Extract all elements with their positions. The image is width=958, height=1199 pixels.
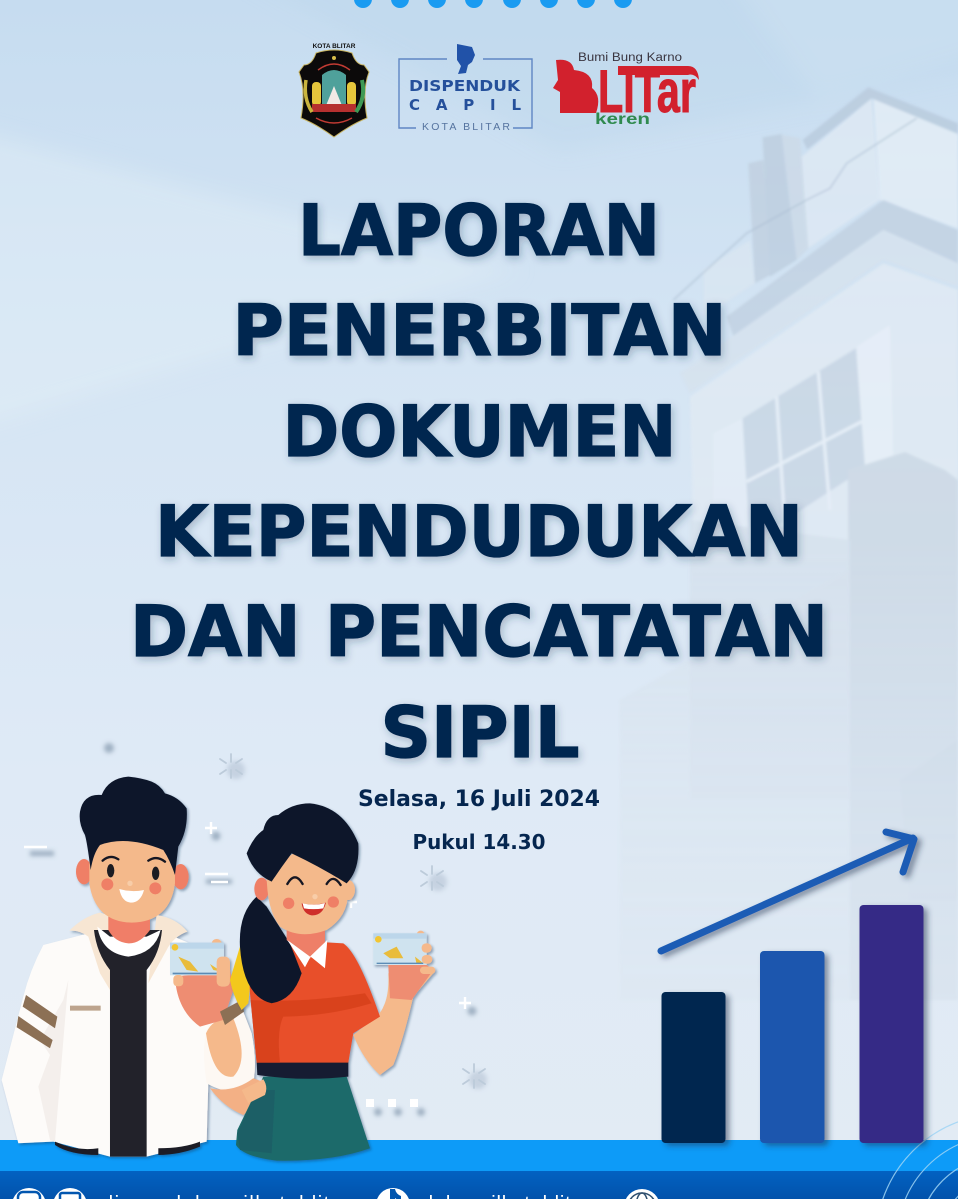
man ears and face <box>76 859 92 884</box>
woman yellow bag <box>230 947 251 1010</box>
footer bar <box>0 1114 958 1199</box>
logo: Blitar Keren: LITar <box>598 58 696 125</box>
logo: Kota Blitar crest <box>299 43 369 137</box>
man character <box>2 777 255 1157</box>
title: KEPENDUDUKAN <box>155 491 803 573</box>
logo: Dispenduk Capil: KOTA BLITAR <box>422 121 510 133</box>
woman character <box>210 803 435 1161</box>
icon: instagram <box>12 1188 46 1199</box>
woman arm behind <box>210 1078 267 1115</box>
man jacket <box>2 932 210 1157</box>
sparkle decorations <box>24 743 487 1116</box>
bar 2 <box>760 951 824 1143</box>
bar chart <box>662 905 924 1143</box>
title: DAN PENCATATAN <box>130 591 828 673</box>
title <box>130 190 828 774</box>
man hair <box>80 777 187 875</box>
man stripes <box>17 995 57 1048</box>
woman ear and face <box>254 878 269 900</box>
title: DOKUMEN <box>282 391 676 473</box>
man eyes and smile <box>107 864 114 877</box>
woman id card and fingers <box>373 931 435 974</box>
logo: Kota Blitar crest: KOTA BLITAR <box>313 43 356 50</box>
title: PENERBITAN <box>232 290 726 372</box>
title: LAPORAN <box>298 190 660 272</box>
logo: Dispenduk Capil: DISPENDUK <box>409 77 522 95</box>
bottom light-blue band <box>0 1140 958 1171</box>
icon: website globe <box>624 1189 660 1199</box>
icon: facebook <box>53 1188 87 1199</box>
title: SIPIL <box>380 692 580 774</box>
footer social icons and handles <box>12 1188 660 1199</box>
woman hand on man's arm <box>242 1079 266 1103</box>
woman hair <box>247 803 358 883</box>
building photo backdrop <box>674 88 958 901</box>
bar 3 <box>860 905 924 1143</box>
logo: Blitar Keren <box>553 52 699 128</box>
logo: Blitar Keren: Bumi Bung Karno <box>578 52 682 64</box>
woman eyes and smile <box>287 877 341 885</box>
man shirt <box>94 930 162 1157</box>
icon: tiktok <box>376 1188 410 1199</box>
time: Pukul 14.30 <box>412 830 546 854</box>
woman neck and collar <box>287 930 325 960</box>
arrow: growth <box>661 832 914 951</box>
woman raised arm with id card <box>353 973 433 1075</box>
date: Selasa, 16 Juli 2024 <box>358 786 600 812</box>
woman ponytail <box>240 897 302 1003</box>
woman skirt <box>236 1077 370 1161</box>
woman shirt <box>248 940 380 1063</box>
logo: Blitar Keren: keren <box>595 111 650 128</box>
logo: Dispenduk Capil <box>399 44 532 133</box>
man arm with id card <box>204 1003 255 1092</box>
top decorative dots <box>354 0 632 8</box>
bar 1 <box>662 992 726 1143</box>
logo: Dispenduk Capil: CAPIL <box>409 96 521 114</box>
woman belt <box>257 1062 348 1079</box>
